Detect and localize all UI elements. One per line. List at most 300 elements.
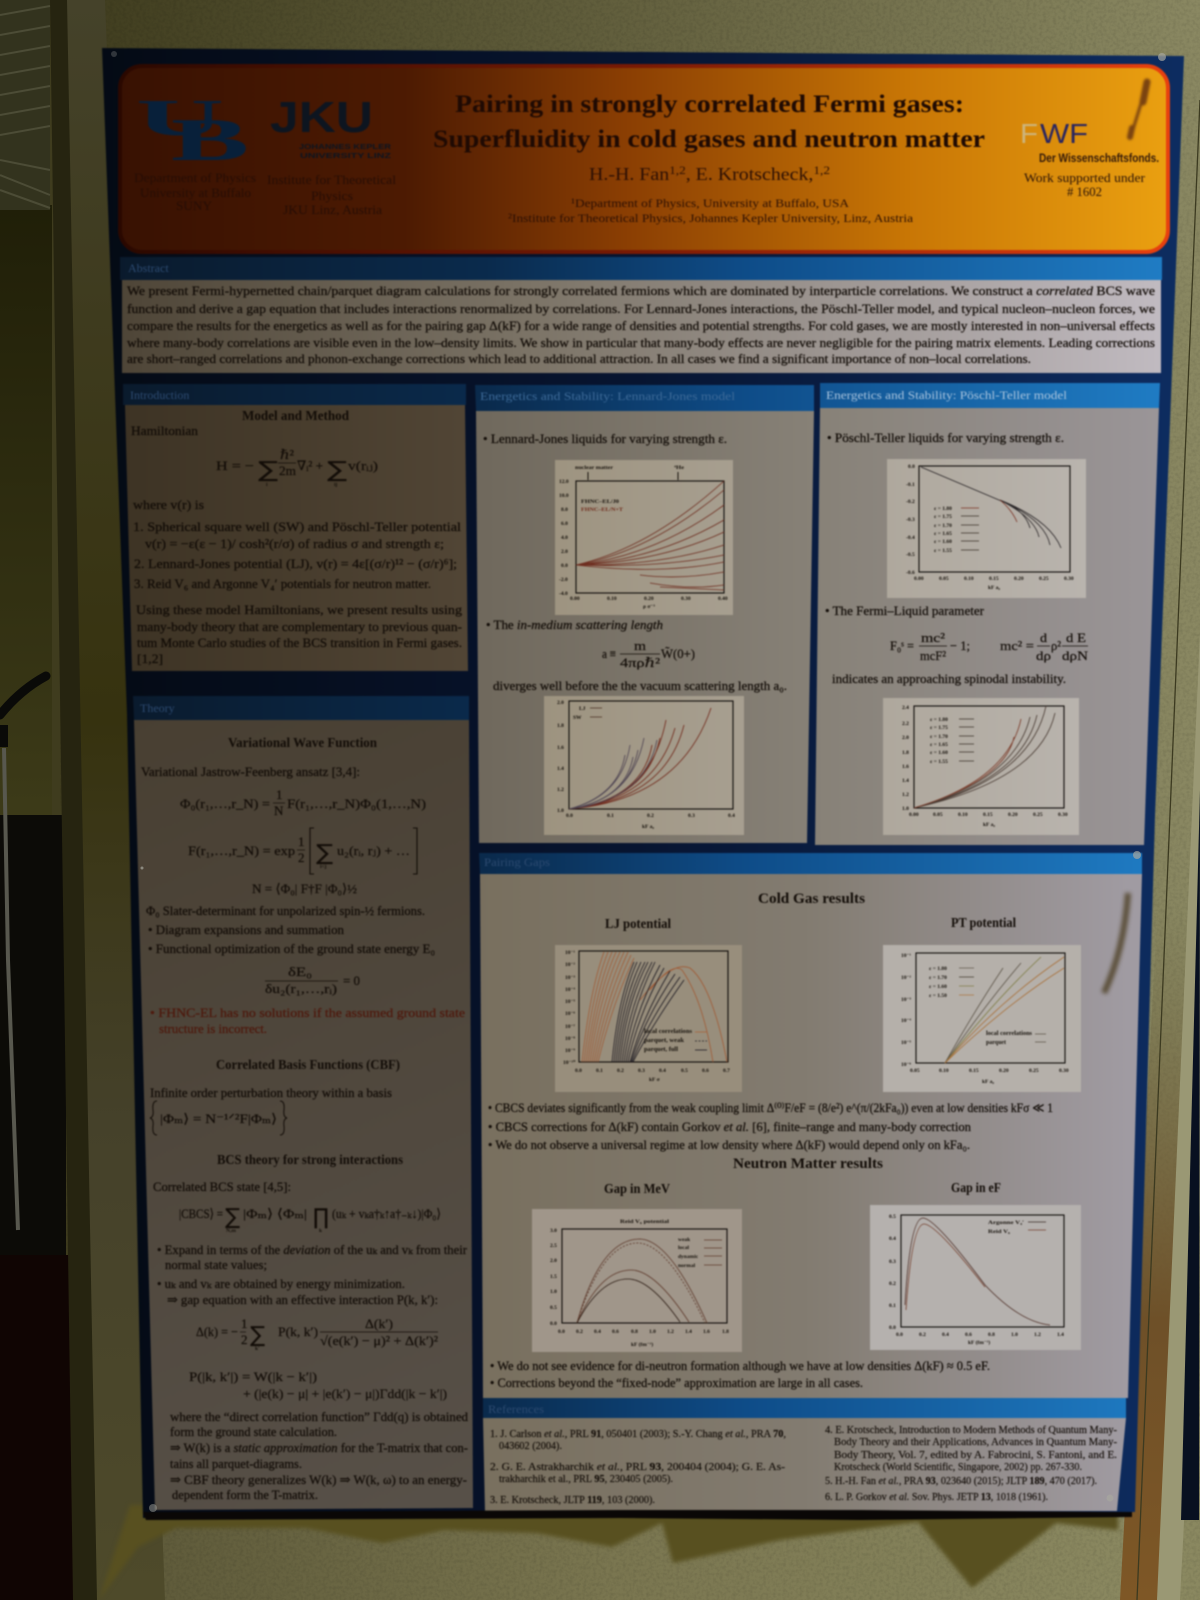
BCS text and equations: • Expand in terms of the deviation of the uₖ and vₖ from their [157, 1242, 468, 1257]
title: Superfluidity in cold gases and neutron matter [433, 126, 985, 153]
logo: UB [136, 90, 249, 173]
chart: energy per particle, Pöschl-Teller: -0.1 [906, 482, 915, 488]
chart: gap vs density, PT: 0.25 [1029, 1068, 1039, 1074]
panel: abstract: Abstract [128, 261, 169, 275]
affiliation: Linz: Physics [311, 188, 353, 203]
affiliation: Buffalo: University at Buffalo [140, 185, 251, 200]
BCS text and equations: P(|k, k′|) = W(|k − k′|) [189, 1369, 317, 1384]
BCS text and equations [153, 1179, 468, 1502]
BCS text and equations: ⇒ W(k) is a static approximation for the T-matrix that con- [170, 1440, 468, 1455]
PT text: • The Fermi–Liquid parameter [825, 603, 985, 618]
chart: energy per particle, Lennard-Jones: 2.0 [561, 549, 568, 555]
chart: gap vs density, PT: 0.30 [1059, 1068, 1069, 1074]
chart: energy per particle, Lennard-Jones: 10.0 [559, 493, 569, 499]
intro text: where v(r) is [133, 497, 204, 512]
chart: scattering length, Lennard-Jones: 0.1 [607, 813, 614, 819]
BCS text and equations: ⇒ gap equation with an effective interaction P(k, k′): [167, 1292, 438, 1307]
chart: energy per particle, Pöschl-Teller: ε = 1.60 [934, 539, 952, 545]
chart: neutron gap in MeV: 0.4 [594, 1329, 601, 1335]
chart: gap vs density, LJ: 0.2 [617, 1068, 624, 1074]
chart: neutron gap in MeV: 1.0 [550, 1289, 557, 1295]
poster bottom edge [143, 1510, 1132, 1520]
variational equations: i<j [320, 864, 327, 870]
chart: scattering length, Lennard-Jones: SW [573, 715, 582, 721]
chart: neutron gap in eF: 1.0 [1011, 1332, 1018, 1338]
hanging tie shadow on poster [1104, 893, 1128, 993]
chart: neutron gap in MeV: 0.2 [576, 1329, 583, 1335]
BCS text and equations: ⇒ CBF theory generalizes W(k) ⇒ W(k, ω) to an energy- [170, 1472, 467, 1487]
chart: gap vs density, LJ: 10⁻³ [565, 975, 575, 981]
chart: energy per particle, Pöschl-Teller: kF a₀ [988, 585, 1000, 591]
chart: energy per particle, Pöschl-Teller: ε = 1.70 [934, 523, 952, 529]
wooden post and right edge [1120, 100, 1200, 1600]
chart: gap vs density, LJ: 0.4 [659, 1068, 666, 1074]
chart: scattering length, Lennard-Jones: 0.4 [728, 813, 735, 819]
panel: references: References [488, 1402, 544, 1416]
chart: gap vs density, PT: ε = 1.70 [929, 975, 947, 981]
chart: energy per particle, Lennard-Jones: -4.0 [559, 591, 568, 597]
BCS text and equations: form the ground state calculation. [170, 1424, 337, 1439]
left reference list: 2. G. E. Astrakharchik et al., PRL 93, 200404 (2004); G. E. As- [490, 1462, 786, 1473]
funding note [1024, 153, 1159, 199]
chart: gap vs density, LJ: 0.3 [638, 1068, 645, 1074]
PT text: dρN [1062, 648, 1089, 663]
heading: cold gas results: Cold Gas results [758, 891, 865, 907]
chart: energy per particle, Lennard-Jones: 6.0 [561, 521, 568, 527]
LJ text: • The in-medium scattering length [486, 617, 663, 632]
chart: gap vs density, LJ: 0.5 [681, 1068, 688, 1074]
logo: FWF: F [1020, 118, 1038, 149]
warning in red: • FHNC-EL has no solutions if the assumed ground state [150, 1005, 465, 1020]
PT text: d [1040, 630, 1048, 645]
chart: scattering length, Pöschl-Teller: ε = 1.70 [930, 734, 948, 740]
chart: gap vs density, PT: 10⁻¹ [901, 953, 911, 959]
chart: neutron gap in MeV: weak [678, 1237, 691, 1243]
chart: energy per particle, Lennard-Jones: 0.10 [607, 596, 617, 602]
chart: neutron gap in MeV: 1.4 [685, 1329, 692, 1335]
PT text: mcF² [920, 648, 946, 663]
intro text: Using these model Hamiltonians, we present results using [136, 602, 463, 617]
institutions: ¹Department of Physics, University at Buffalo, USA [571, 196, 849, 210]
BCS text and equations: (uₖ + vₖa†ₖ↑a†₋ₖ↓)|Φ₀⟩ [332, 1206, 441, 1221]
chart: gap vs density, PT: ε = 1.50 [929, 993, 947, 999]
chart: scattering length, Lennard-Jones: 1.4 [557, 766, 564, 772]
variational equations: • Diagram expansions and summation [148, 922, 344, 937]
chart: scattering length, Pöschl-Teller: 1.2 [902, 792, 909, 798]
chart: neutron gap in MeV: 1.5 [550, 1274, 557, 1280]
chart: neutron gap in MeV: 1.2 [667, 1329, 674, 1335]
abstract text [127, 283, 1155, 366]
chart: neutron gap in MeV: 2.0 [550, 1258, 557, 1264]
chart: scattering length, Lennard-Jones: 0.3 [688, 813, 695, 819]
LJ text: W̃(0+) [661, 646, 695, 661]
panel: theory: Theory [140, 701, 175, 715]
chart: scattering length, Pöschl-Teller: 1.0 [902, 806, 909, 812]
chart: energy per particle, Pöschl-Teller: 0.00 [914, 576, 924, 582]
PT text [825, 430, 1089, 686]
chart: scattering length, Pöschl-Teller: 0.30 [1058, 812, 1068, 818]
chart: neutron gap in eF: 0.5 [889, 1214, 896, 1220]
chart: neutron gap in MeV: 0.5 [550, 1305, 557, 1311]
chart: scattering length, Pöschl-Teller: 0.20 [1008, 812, 1018, 818]
CBF text: Infinite order perturbation theory within a basis [150, 1085, 392, 1100]
BCS text and equations: k′ [255, 1346, 260, 1352]
chart: neutron gap in eF: 0.0 [889, 1325, 896, 1331]
chart: gap vs density, LJ: 10⁻⁴ [565, 987, 575, 993]
affiliation: Linz: Institute for Theoretical [267, 172, 396, 187]
variational equations: Φ₀(r₁,…,r_N) = [180, 796, 270, 811]
chart: energy per particle, Pöschl-Teller: -0.6 [906, 570, 915, 576]
chart: neutron gap in MeV [532, 1209, 742, 1352]
logo: UB: U [136, 90, 224, 147]
chart: scattering length, Lennard-Jones: 1.0 [557, 808, 564, 814]
chart: gap vs density, PT: 10⁻³ [901, 997, 911, 1003]
PT text: mc² [921, 630, 945, 645]
logo: UB: B [171, 107, 249, 173]
intro text: 2. Lennard-Jones potential (LJ), v(r) = 4ε[(σ/r)¹² − (σ/r)⁶]; [134, 556, 457, 571]
abstract text: are short–ranged correlations and phonon-exchange corrections which lead to additional attraction. In all cases we find a significant importance of non–local correlations. [127, 351, 1031, 366]
chart: energy per particle, Pöschl-Teller: -0.4 [906, 535, 915, 541]
intro text: ∇ᵢ² + [297, 458, 323, 473]
chart: scattering length, Pöschl-Teller: ε = 1.75 [930, 725, 948, 731]
PT text: dρ [1036, 648, 1051, 663]
chart: gap vs density, LJ: kF σ [649, 1077, 660, 1083]
chart: neutron gap in MeV: Reid V₆ potential [620, 1219, 670, 1225]
variational equations: 1 [276, 787, 282, 802]
chart: neutron gap in eF: 0.2 [919, 1332, 926, 1338]
chart: scattering length, Pöschl-Teller: 1.6 [902, 764, 909, 770]
chart: neutron gap in MeV: 0.0 [558, 1329, 565, 1335]
chart: neutron gap in eF: Argonne V₄′ [988, 1220, 1025, 1226]
variational equations: N [274, 803, 284, 818]
panel: abstract [120, 257, 1162, 373]
BCS text and equations: N,m [226, 1228, 236, 1234]
logo: JKU [270, 93, 392, 160]
variational equations: u₂(rᵢ, rⱼ) + … [337, 843, 410, 858]
chart: energy per particle, Pöschl-Teller: -0.5 [906, 552, 915, 558]
chart: neutron gap in MeV: 1.6 [703, 1329, 710, 1335]
chart: scattering length, Pöschl-Teller: 0.25 [1033, 812, 1043, 818]
variational equations: 2 [298, 850, 304, 865]
left reference list: trakharchik et al., PRL 95, 230405 (2005). [499, 1474, 673, 1485]
intro text: ∑ [258, 458, 278, 483]
variational equations: δE₀ [288, 964, 312, 979]
PT text: d E [1066, 630, 1086, 645]
chart: gap vs density, LJ: 0.0 [575, 1068, 582, 1074]
LJ text [483, 431, 787, 693]
chart: gap vs density, LJ: 10⁻⁵ [565, 999, 575, 1005]
chart: gap vs density, PT [883, 945, 1081, 1092]
chart: neutron gap in MeV: 0.6 [612, 1329, 619, 1335]
chart: energy per particle, Pöschl-Teller: 0.15 [989, 576, 999, 582]
chart: scattering length, Pöschl-Teller: ε = 1.65 [930, 742, 948, 748]
chart: gap vs density, PT: parquet [986, 1040, 1006, 1046]
chart: scattering length, Pöschl-Teller: 0.05 [933, 812, 943, 818]
chart: neutron gap in eF: Reid V₆ [988, 1229, 1010, 1235]
chart: energy per particle, Pöschl-Teller: ε = 1.75 [934, 514, 952, 520]
chart: scattering length, Pöschl-Teller: 0.00 [909, 812, 919, 818]
chart: gap vs density, LJ: parquet, full [644, 1047, 678, 1053]
right reference list: 6. L. P. Gorkov et al. Sov. Phys. JETP 13, 1018 (1961). [825, 1492, 1048, 1503]
title [433, 91, 985, 153]
BCS text and equations: |Φₘ⟩ ⟨Φₘ| [243, 1206, 307, 1221]
chart: scattering length, Lennard-Jones: LJ [579, 706, 586, 712]
chart: energy per particle, Pöschl-Teller: 0.20 [1014, 576, 1024, 582]
chart: energy per particle, Lennard-Jones: nuclear matter [575, 465, 614, 471]
chart: neutron gap in eF: 0.4 [942, 1332, 949, 1338]
right reference list: Body Theory, Vol. 7, edited by A. Fabrocini, S. Fantoni, and E. [834, 1450, 1117, 1461]
chart: gap vs density, LJ: 10⁻⁷ [565, 1024, 575, 1030]
funding note: Der Wissenschaftsfonds. [1039, 153, 1159, 165]
chart: neutron gap in MeV: 1.0 [649, 1329, 656, 1335]
chart: energy per particle, Lennard-Jones: 0.0 [561, 563, 568, 569]
variational equations: Φ₀ Slater-determinant for unpolarized spin-½ fermions. [146, 903, 425, 918]
cold gas bullets: • CBCS corrections for Δ(kF) contain Gorkov et al. [6], finite–range and many-body correction [488, 1119, 971, 1134]
cold gas bullets: • CBCS deviates significantly from the weak coupling limit Δ⁽⁰⁾F/eF = (8/e²) e^(π/(2kFa₀)) even at low densities kFσ ≪ 1 [488, 1100, 1053, 1115]
CBF text: |Φₘ⟩ = N⁻¹ᐟ²F|Φₘ⟩ [160, 1111, 277, 1126]
PT text: ρ² [1051, 638, 1061, 653]
chart: gap vs density, PT: kF a₀ [982, 1079, 994, 1085]
right reference list: 5. H.-H. Fan et al., PRA 93, 023640 (2015); JLTP 189, 470 (2017). [825, 1476, 1097, 1487]
intro text [131, 423, 463, 666]
chart: neutron gap in MeV: normal [678, 1263, 696, 1269]
chart: neutron gap in eF: 0.3 [889, 1259, 896, 1265]
abstract text: where many-body correlations are visible even in the low–density limits. We show in particular that many-body effects are never negligible for the pairing matrix elements. Leading corrections [127, 335, 1155, 350]
LJ text: m [634, 638, 646, 653]
chart: scattering length, Pöschl-Teller: ε = 1.60 [930, 750, 948, 756]
intro text: 1. Spherical square well (SW) and Pöschl-Teller potential [133, 519, 461, 534]
chart: gap vs density, LJ: 10⁻¹ [565, 950, 575, 956]
subheading: LJ potential: LJ potential [605, 916, 671, 931]
chart: neutron gap in MeV: 0.8 [631, 1329, 638, 1335]
chart: gap vs density, PT: 10⁻⁵ [901, 1040, 911, 1046]
chart: energy per particle, Pöschl-Teller [887, 459, 1086, 598]
chart: energy per particle, Pöschl-Teller: 0.25 [1039, 576, 1049, 582]
chart: energy per particle, Lennard-Jones: 0.30 [681, 596, 691, 602]
heading: correlated basis functions: Correlated Basis Functions (CBF) [216, 1057, 400, 1072]
PT text: indicates an approaching spinodal instability. [832, 671, 1066, 686]
authors: 1,2 [813, 163, 830, 177]
neutron matter bullets: • Corrections beyond the “fixed-node” approximation are large in all cases. [490, 1375, 863, 1390]
affiliation: Linz: JKU Linz, Austria [283, 202, 382, 217]
chart: gap vs density, LJ: 0.1 [596, 1068, 603, 1074]
variational equations: ∑ [316, 841, 333, 866]
BCS text and equations: ∑ [250, 1323, 265, 1348]
microphone on stand [0, 676, 46, 1230]
BCS text and equations: Δ(k) = − [196, 1324, 238, 1339]
subheading: gap in MeV: Gap in MeV [604, 1181, 670, 1196]
chart: scattering length, Lennard-Jones [544, 696, 744, 835]
room area at left [0, 0, 97, 1600]
BCS text and equations: 2 [241, 1332, 248, 1347]
chart: energy per particle, Lennard-Jones: -2.0 [559, 577, 568, 583]
BCS text and equations: tains all parquet-diagrams. [170, 1456, 302, 1471]
chart: energy per particle, Pöschl-Teller: -0.2 [906, 499, 915, 505]
cold gas bullets [488, 1100, 1053, 1152]
right reference list: Body Theory and their Applications, Advances in Quantum Many- [834, 1437, 1117, 1448]
chart: energy per particle, Lennard-Jones: 0.00 [570, 596, 580, 602]
chart: gap vs density, LJ: 10⁻⁸ [565, 1036, 575, 1042]
CBF text [150, 1085, 392, 1135]
abstract text: We present Fermi-hypernetted chain/parquet diagram calculations for strongly correlated fermions which are dominated by interparticle correlations. We construct a correlated BCS wave [127, 283, 1155, 298]
chart: scattering length, Pöschl-Teller: 0.15 [983, 812, 993, 818]
LJ text: 4πρℏ² [620, 655, 660, 670]
funding note: Work supported under [1024, 171, 1146, 185]
chart: gap vs density, LJ: 10⁻⁹ [565, 1048, 575, 1054]
warning in red [150, 1005, 465, 1036]
institutions [508, 196, 914, 225]
chart: gap vs density, LJ: 0.7 [723, 1068, 730, 1074]
chart: energy per particle, Lennard-Jones: ρ σ⁻³ [643, 604, 655, 610]
BCS text and equations: k [319, 1228, 323, 1234]
chart: energy per particle, Lennard-Jones: 0.40 [718, 596, 728, 602]
variational equations: 1 [298, 834, 304, 849]
heading: model and method: Model and Method [242, 408, 349, 423]
subheading: PT potential: PT potential [951, 915, 1016, 930]
chart: scattering length, Lennard-Jones: 1.6 [557, 745, 564, 751]
poster shadow below [99, 1505, 1118, 1600]
PT text: mc² = [1000, 638, 1034, 653]
panel: Lennard-Jones energetics: Energetics and Stability: Lennard-Jones model [480, 389, 736, 403]
panel: references [483, 1398, 1126, 1512]
chart: energy per particle, Lennard-Jones: FHNC–EL/J0 [581, 499, 619, 505]
chart: scattering length, Pöschl-Teller: 0.10 [958, 812, 968, 818]
chart: neutron gap in MeV: 2.5 [550, 1243, 557, 1249]
chart: scattering length, Pöschl-Teller: 2.2 [902, 721, 909, 727]
chart: energy per particle, Lennard-Jones: 4.0 [561, 535, 568, 541]
intro text: v(r) = −ε(ε − 1)/ cosh²(r/σ) of radius σ and strength ε; [145, 536, 444, 551]
BCS text and equations: √(e(k′) − μ)² + Δ(k′)² [320, 1333, 438, 1348]
BCS text and equations: P(k, k′) [278, 1324, 318, 1339]
chart: neutron gap in eF: 0.8 [988, 1332, 995, 1338]
BCS text and equations: dependent form the T-matrix. [172, 1487, 318, 1502]
hanging tie shadow [1130, 82, 1147, 137]
chart: energy per particle, Lennard-Jones: 0.20 [644, 596, 654, 602]
variational equations: δu₂(r₁,…,rᵢ) [265, 981, 337, 996]
BCS text and equations: ∏ [313, 1205, 329, 1230]
chart: gap vs density, PT: 0.05 [910, 1068, 920, 1074]
panel: introduction [123, 384, 468, 671]
chart: scattering length, Pöschl-Teller: 1.4 [902, 778, 909, 784]
intro text: i [266, 482, 268, 488]
chart: energy per particle, Lennard-Jones [555, 460, 733, 615]
LJ text: a ≡ [602, 646, 616, 661]
chart: scattering length, Pöschl-Teller [883, 698, 1079, 835]
PT text: • Pöschl-Teller liquids for varying strength ε. [827, 430, 1064, 445]
variational equations: = 0 [343, 973, 360, 988]
abstract text: function and derive a gap equation that includes interactions renormalized by correlations. For Lennard-Jones interactions, the Pöschl-Teller model, and typical nucleon–nucleon forces, we [127, 301, 1155, 316]
chart: gap vs density, PT: 0.15 [969, 1068, 979, 1074]
LJ text: diverges well before the the vacuum scattering length a₀. [493, 678, 787, 693]
chart: energy per particle, Pöschl-Teller: ε = 1.80 [934, 506, 952, 512]
chart: energy per particle, Lennard-Jones: ⁴He [674, 465, 685, 471]
affiliation: Linz [267, 172, 396, 217]
chart: gap vs density, PT: local correlations [986, 1031, 1033, 1037]
right reference list [825, 1425, 1117, 1503]
intro text: ℏ² [280, 447, 294, 462]
BCS text and equations: |CBCS⟩ = [179, 1206, 223, 1221]
heading: variational wave function: Variational Wave Function [228, 735, 377, 750]
chart: neutron gap in eF: 0.0 [896, 1332, 903, 1338]
header banner [120, 66, 1168, 252]
panel: pairing gaps [479, 853, 1142, 1398]
chart: gap vs density, LJ: local correlations [644, 1029, 693, 1035]
funding note: # 1602 [1067, 185, 1102, 199]
chart: gap vs density, PT: ε = 1.80 [929, 966, 947, 972]
chart: energy per particle, Pöschl-Teller: -0.3 [906, 517, 915, 523]
right reference list: Krotscheck (World Scientific, Singapore, 2002) pp. 267-330. [834, 1462, 1082, 1473]
chart: scattering length, Pöschl-Teller: kF a₀ [983, 822, 995, 828]
BCS text and equations: • uₖ and vₖ are obtained by energy minimization. [157, 1276, 405, 1291]
BCS text and equations: Δ(k′) [365, 1316, 393, 1331]
chart: neutron gap in eF: 1.2 [1034, 1332, 1041, 1338]
chart: neutron gap in MeV: 0.0 [550, 1321, 557, 1327]
variational equations: F(r₁,…,r_N)Φ₀(1,…,N) [287, 796, 426, 811]
chart: energy per particle, Lennard-Jones: FHNC–EL/N+T [581, 507, 623, 513]
variational equations: Variational Jastrow-Feenberg ansatz [3,4]: [141, 764, 360, 779]
chart: neutron gap in MeV: kF (fm⁻¹) [631, 1341, 653, 1348]
chart: neutron gap in eF: 0.2 [889, 1281, 896, 1287]
BCS text and equations: 1 [241, 1316, 248, 1331]
heading: BCS theory: BCS theory for strong interactions [217, 1152, 403, 1167]
chart: scattering length, Pöschl-Teller: ε = 1.80 [930, 717, 948, 723]
chart: energy per particle, Pöschl-Teller: 0.0 [908, 464, 915, 470]
chart: scattering length, Lennard-Jones: 0.0 [566, 813, 573, 819]
chart: gap vs density, LJ: 10⁻⁶ [565, 1011, 575, 1017]
chart: neutron gap in eF: 0.1 [889, 1303, 896, 1309]
chart: scattering length, Pöschl-Teller: ε = 1.55 [930, 759, 948, 765]
authors: , E. Krotscheck, [686, 164, 813, 184]
chart: gap vs density, PT: 0.10 [939, 1068, 949, 1074]
variational equations [141, 764, 435, 996]
chart: gap vs density, PT: ε = 1.60 [929, 984, 947, 990]
chart: energy per particle, Pöschl-Teller: 0.30 [1064, 576, 1074, 582]
intro text: [1,2] [137, 651, 163, 666]
variational equations: F(r₁,…,r_N) = exp [188, 843, 295, 858]
chart: gap vs density, LJ: 10⁻¹⁰ [563, 1059, 576, 1066]
affiliation: Buffalo [134, 170, 256, 213]
BCS text and equations: ∑ [225, 1205, 240, 1230]
left reference list: 3. E. Krotscheck, JLTP 119, 103 (2000). [490, 1495, 655, 1506]
chart: energy per particle, Pöschl-Teller: 0.05 [939, 576, 949, 582]
chart: energy per particle, Pöschl-Teller: ε = 1.55 [934, 548, 952, 554]
neutron matter bullets: • We do not see evidence for di-neutron formation although we have at low densities Δ(kF) ≈ 0.5 eF. [490, 1358, 990, 1373]
chart: gap vs density, LJ [555, 945, 742, 1092]
chart: gap vs density, LJ: 10⁻² [565, 962, 575, 968]
logo: FWF [1020, 118, 1088, 149]
chart: gap vs density, LJ: parquet, weak [644, 1038, 685, 1044]
logo: JKU: JOHANNES KEPLER [299, 144, 391, 151]
PT text: F₀ˢ = [890, 638, 914, 653]
panel: introduction: Introduction [130, 388, 189, 402]
wall vent [0, 0, 50, 210]
chart: neutron gap in eF: 1.4 [1057, 1332, 1064, 1338]
chart: neutron gap in eF: kF (fm⁻¹) [968, 1339, 990, 1346]
left reference list: 043602 (2004). [499, 1441, 562, 1452]
abstract text: compare the results for the energetics as well as for the pairing gap Δ(kF) for a wide range of densities and potential strengths. For cold gases, we are mostly interested in non–universal effects [127, 318, 1155, 333]
chart: neutron gap in eF: 0.4 [889, 1236, 896, 1242]
cold gas bullets: • We do not observe a universal regime at low density where Δ(kF) would depend only on kFa₀. [488, 1137, 970, 1152]
chart: scattering length, Pöschl-Teller: 2.4 [902, 705, 909, 711]
chart: scattering length, Lennard-Jones: 0.2 [647, 813, 654, 819]
chart: neutron gap in MeV: 3.0 [550, 1228, 557, 1234]
panel: Pöschl-Teller energetics [815, 383, 1160, 845]
intro text: ij [334, 482, 338, 488]
chart: gap vs density, PT: 10⁻⁶ [901, 1062, 911, 1068]
intro text: 3. Reid V₆ and Argonne V₄′ potentials for neutron matter. [134, 576, 431, 591]
chart: scattering length, Pöschl-Teller: 2.0 [902, 735, 909, 741]
chart: neutron gap in eF: 0.6 [965, 1332, 972, 1338]
